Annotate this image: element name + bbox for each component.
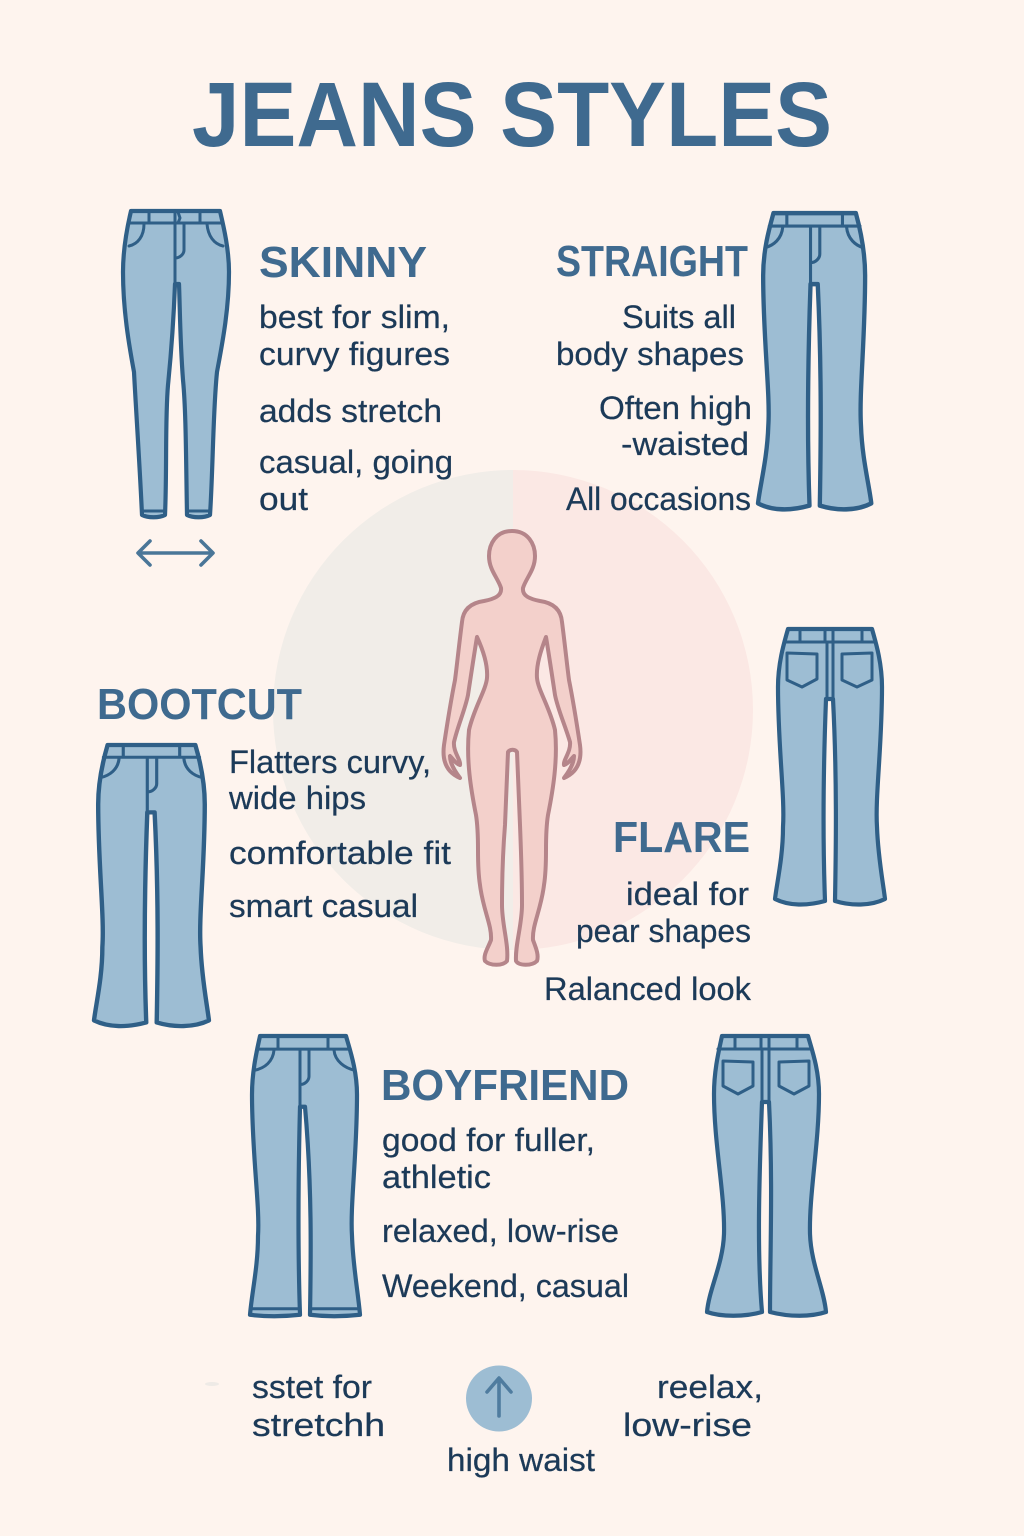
text: bootcut details: wide hips [228,780,366,816]
text: bootcut details: smart casual [229,888,418,924]
text: boyfriend details: good for fuller, [382,1122,595,1158]
icon: boyfriend jeans back [707,1036,826,1316]
heading: flare: FLARE [613,813,750,862]
text: skinny details [259,299,453,517]
caption: stretch: stretchh [252,1407,385,1443]
text: straight details [556,299,752,517]
text: flare details: pear shapes [576,913,751,949]
text: skinny details: curvy figures [259,336,450,372]
icon: skinny jeans [123,211,229,517]
icon: high waist arrow [466,1366,532,1432]
text: skinny details: adds stretch [259,393,442,429]
caption: high waist: high waist [447,1442,595,1478]
text: flare details: Ralanced look [544,971,752,1007]
icon: stretch arrow [138,541,213,565]
text: boyfriend details: relaxed, low-rise [382,1213,619,1249]
text: straight details: Often high [599,390,752,426]
caption: relax: reelax, [657,1369,763,1405]
text: bootcut details: Flatters curvy, [229,744,431,780]
caption: stretch: sstet for [252,1369,372,1405]
icon: bootcut jeans [94,745,209,1026]
icon: boyfriend jeans [250,1036,360,1316]
title: JEANS STYLES [192,64,832,166]
text: straight details: -waisted [621,426,749,462]
text: flare details [544,876,752,1007]
heading: straight: STRAIGHT [556,237,748,286]
text: skinny details: best for slim, [259,299,450,335]
text: bootcut details: comfortable fit [229,835,451,871]
caption: relax [623,1369,763,1443]
text: straight details: body shapes [556,336,744,372]
text: skinny details: casual, going [259,444,453,480]
icon: straight jeans [758,213,871,509]
heading: skinny: SKINNY [259,238,427,287]
heading: boyfriend: BOYFRIEND [381,1061,629,1110]
background circle [273,470,753,950]
smudge [205,1382,219,1386]
text: straight details: All occasions [566,481,751,517]
text: boyfriend details: Weekend, casual [382,1268,629,1304]
icon: flare jeans back [775,629,885,905]
text: flare details: ideal for [626,876,749,912]
text: boyfriend details [382,1122,629,1304]
text: boyfriend details: athletic [382,1159,491,1195]
figure: body silhouette [444,531,580,965]
caption: stretch [252,1369,385,1443]
text: bootcut details [228,744,451,924]
heading: bootcut: BOOTCUT [97,680,302,729]
text: skinny details: out [259,481,308,517]
caption: relax: low-rise [623,1407,752,1443]
text: straight details: Suits all [622,299,736,335]
